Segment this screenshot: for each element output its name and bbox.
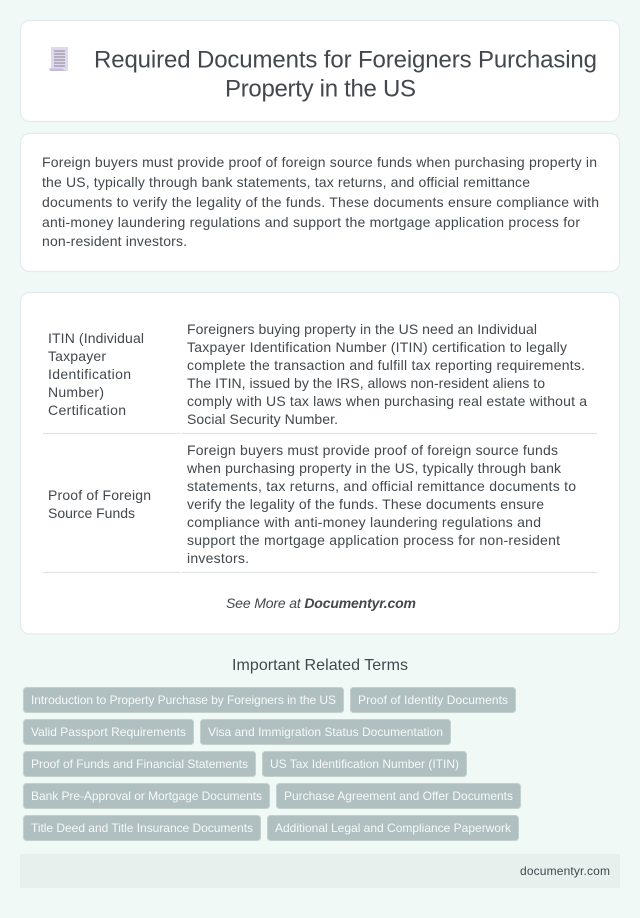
panel: introduction (20, 134, 620, 272)
related terms tags: Title Deed and Title Insurance Documents (31, 821, 253, 835)
footer (20, 854, 620, 888)
related terms tags: Purchase Agreement and Offer Documents (284, 789, 513, 803)
row text: ITIN: comply with US tax laws when purchasing real estate without a (187, 393, 587, 409)
related terms tags: Proof of Identity Documents (358, 693, 508, 707)
row text: proof of funds: Foreign buyers must provide proof of foreign source funds (187, 442, 558, 458)
title: Required Documents for Foreigners Purchasing (94, 46, 597, 74)
panel: documents table (20, 292, 620, 634)
title: Property in the US (225, 76, 416, 102)
related terms tags: Valid Passport Requirements (31, 725, 186, 739)
related terms tags (24, 688, 520, 840)
related terms tags: US Tax Identification Number (ITIN) (270, 757, 459, 771)
row label: ITIN: Certification (48, 402, 126, 418)
intro text: documents to verify the legality of the funds. These documents ensure compliance with (42, 194, 599, 210)
row label: ITIN: Number) (48, 384, 104, 400)
row label: ITIN (48, 330, 144, 418)
row label: ITIN: Identification (48, 366, 131, 382)
related terms tags: Introduction to Property Purchase by Foreigners in the US (31, 693, 336, 707)
related terms tags: Visa and Immigration Status Documentation (208, 725, 443, 739)
row text: proof of funds: verify the legality of the funds. These documents ensure (187, 496, 544, 512)
row text: ITIN (187, 321, 587, 427)
icon: document (49, 47, 68, 71)
intro text: Foreign buyers must provide proof of foreign source funds when purchasing property in (42, 154, 597, 170)
row text: proof of funds (186, 442, 576, 566)
row text: ITIN: Foreigners buying property in the US need an Individual (187, 321, 537, 337)
row text: proof of funds: compliance with anti-money laundering regulations and (187, 514, 541, 530)
row text: ITIN: complete the transaction and fulfill tax reporting requirements. (187, 357, 585, 373)
row text: proof of funds: investors. (187, 550, 249, 566)
intro text: non-resident investors. (42, 233, 187, 249)
heading: related terms: Important Related Terms (232, 657, 408, 674)
intro text: anti-money laundering regulations and support the mortgage application process for (42, 214, 580, 230)
title (94, 46, 597, 102)
related terms tags: Bank Pre-Approval or Mortgage Documents (31, 789, 262, 803)
row label: ITIN: ITIN (Individual (48, 330, 144, 346)
intro text: the US, typically through bank statements, tax returns, and official remittance (42, 174, 530, 190)
row text: ITIN: Taxpayer Identification Number (ITIN) certification to legally (187, 339, 567, 355)
row text: proof of funds: support the mortgage application process for non-resident (187, 532, 560, 548)
row label: proof of funds: Proof of Foreign (48, 487, 151, 503)
row text: ITIN: Social Security Number. (187, 411, 338, 427)
intro text (42, 154, 599, 249)
row label: ITIN: Taxpayer (48, 348, 106, 364)
row label: proof of funds: Source Funds (48, 505, 135, 521)
row text: ITIN: The ITIN, issued by the IRS, allows non-resident aliens to (187, 375, 545, 391)
panel: header (20, 20, 620, 122)
related terms tags: Proof of Funds and Financial Statements (31, 757, 248, 771)
footer: documentyr.com (520, 864, 610, 878)
row text: proof of funds: when purchasing property in the US, typically through bank (186, 460, 562, 476)
see more link: See More at Documentyr.com (226, 595, 416, 611)
related terms tags: Additional Legal and Compliance Paperwork (275, 821, 512, 835)
row label: proof of funds (48, 487, 151, 521)
row text: proof of funds: statements, tax returns, and official remittance documents to (187, 478, 576, 494)
